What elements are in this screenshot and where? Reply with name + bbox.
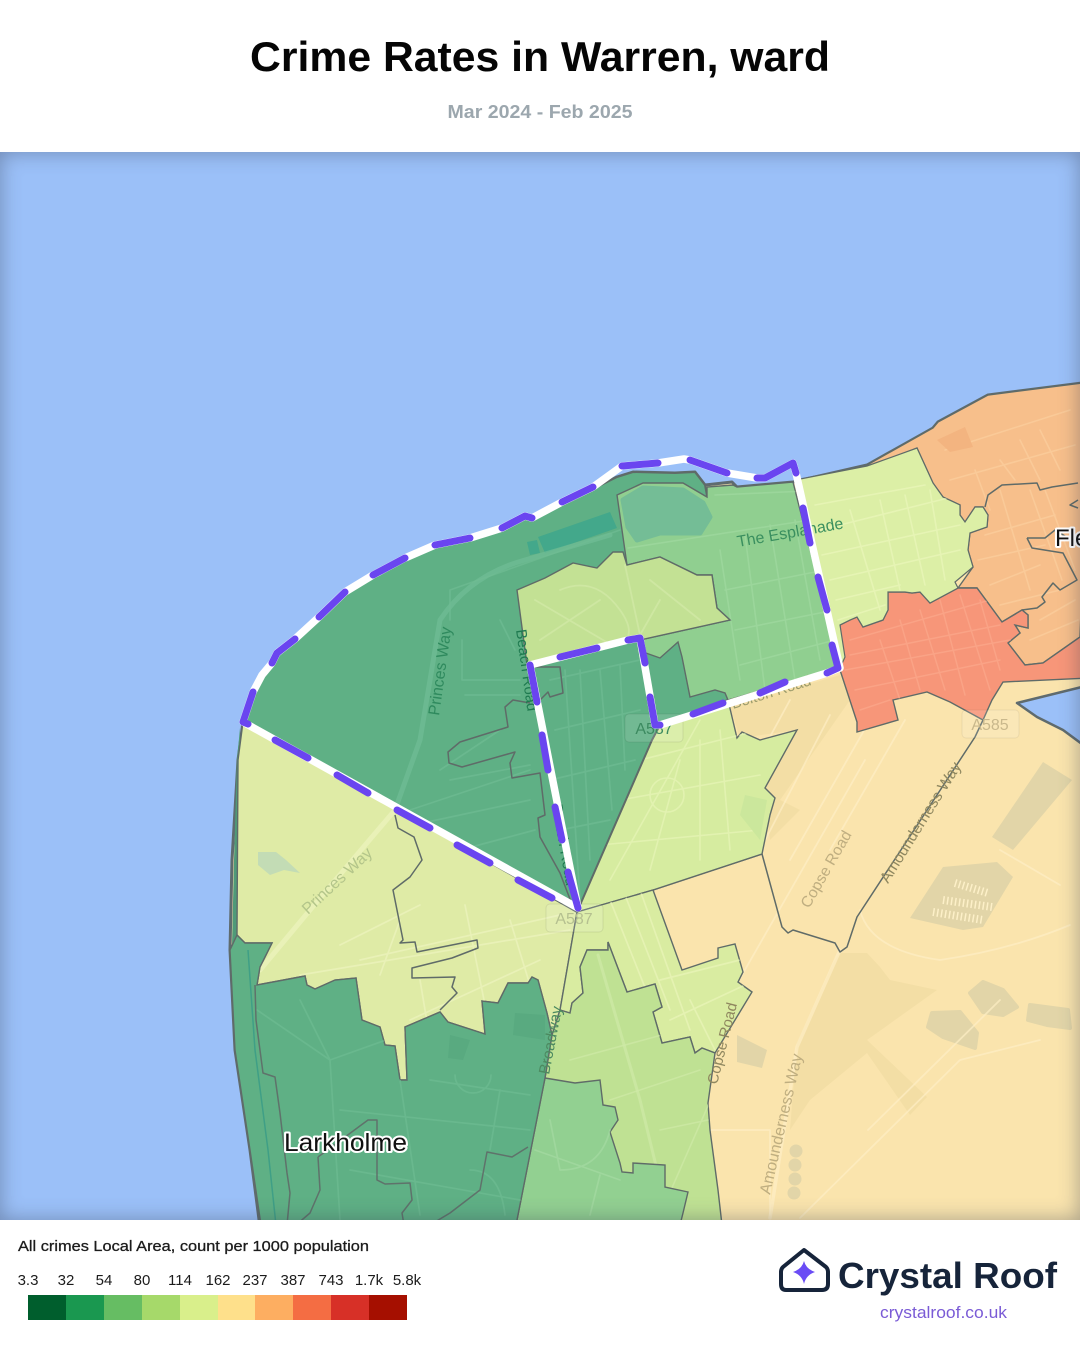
legend values: 1.7k <box>355 1272 384 1289</box>
choropleth: medium green south <box>516 1078 688 1225</box>
choropleth: light green south <box>546 942 722 1220</box>
legend values: 114 <box>168 1272 192 1289</box>
lake <box>623 488 710 540</box>
icon: house with star <box>781 1250 828 1290</box>
beige landscape features <box>653 675 1072 1218</box>
road shield: A587 south <box>546 904 603 932</box>
legend values: 387 <box>280 1272 306 1289</box>
legend values: 32 <box>58 1272 74 1289</box>
sports pitches <box>527 512 617 555</box>
legend panel <box>18 1238 422 1320</box>
logo wordmark: Crystal Roof <box>838 1255 1058 1296</box>
legend values: 162 <box>205 1272 231 1289</box>
road shield: A585: A585 <box>971 717 1009 734</box>
choropleth: pale green central south <box>577 700 797 912</box>
map labels: Amounderness Way <box>757 1052 806 1196</box>
map labels: Larkholme <box>284 1129 407 1157</box>
road shield: A585 <box>962 710 1019 738</box>
map labels: Copse Road <box>798 828 856 911</box>
choropleth: red area <box>840 588 1080 732</box>
map labels: Amounderness Way <box>877 759 965 886</box>
choropleth: orange area <box>867 382 1080 665</box>
road shield: A587 north <box>625 714 683 742</box>
legend values: 237 <box>242 1272 268 1289</box>
logo: Crystal Roof <box>781 1250 1058 1322</box>
map labels: Copse Road <box>704 1001 741 1086</box>
logo url: crystalroof.co.uk <box>880 1304 1008 1322</box>
legend values: 5.8k <box>393 1272 422 1289</box>
subtitle: date range: Mar 2024 - Feb 2025 <box>448 102 632 122</box>
road shield: A587 south: A587 <box>555 911 593 928</box>
west shore strip <box>232 728 240 945</box>
map labels: Beach Road <box>512 628 540 712</box>
road shield: A587 north: A587 <box>635 721 673 738</box>
choropleth: dark green Warren north-west <box>243 472 730 912</box>
choropleth: pale green west <box>237 722 577 1080</box>
map labels: The Esplanade <box>736 515 845 551</box>
map labels <box>284 515 1080 1196</box>
legend values: 743 <box>318 1272 344 1289</box>
legend values: 80 <box>134 1272 150 1289</box>
legend values: 3.3 <box>18 1272 38 1289</box>
legend colour scale <box>28 1295 407 1320</box>
bay water <box>1017 685 1080 750</box>
map labels: Beach Road <box>548 803 579 887</box>
choropleth: pale green junction south-east <box>560 890 752 1053</box>
land base <box>230 382 1080 1235</box>
legend title: All crimes Local Area, count per 1000 population <box>18 1238 369 1255</box>
choropleth: dark green Larkholme <box>230 935 552 1225</box>
choropleth: medium green Esplanade <box>617 482 840 700</box>
choropleth: light green centre <box>517 552 730 665</box>
ward boundary: purple dashes <box>243 460 838 908</box>
map labels: Princes Way <box>426 626 455 717</box>
map labels: Broadway <box>536 1005 566 1076</box>
map labels: Princes Way <box>299 845 376 918</box>
legend values <box>18 1272 422 1289</box>
sea <box>0 152 1080 1220</box>
choropleth: pale green east <box>795 448 988 668</box>
title: Crime Rates in Warren, ward <box>250 33 830 80</box>
legend values: 54 <box>96 1272 112 1289</box>
ward boundary: white base <box>243 459 840 908</box>
map labels: Bolton Road <box>729 672 813 713</box>
